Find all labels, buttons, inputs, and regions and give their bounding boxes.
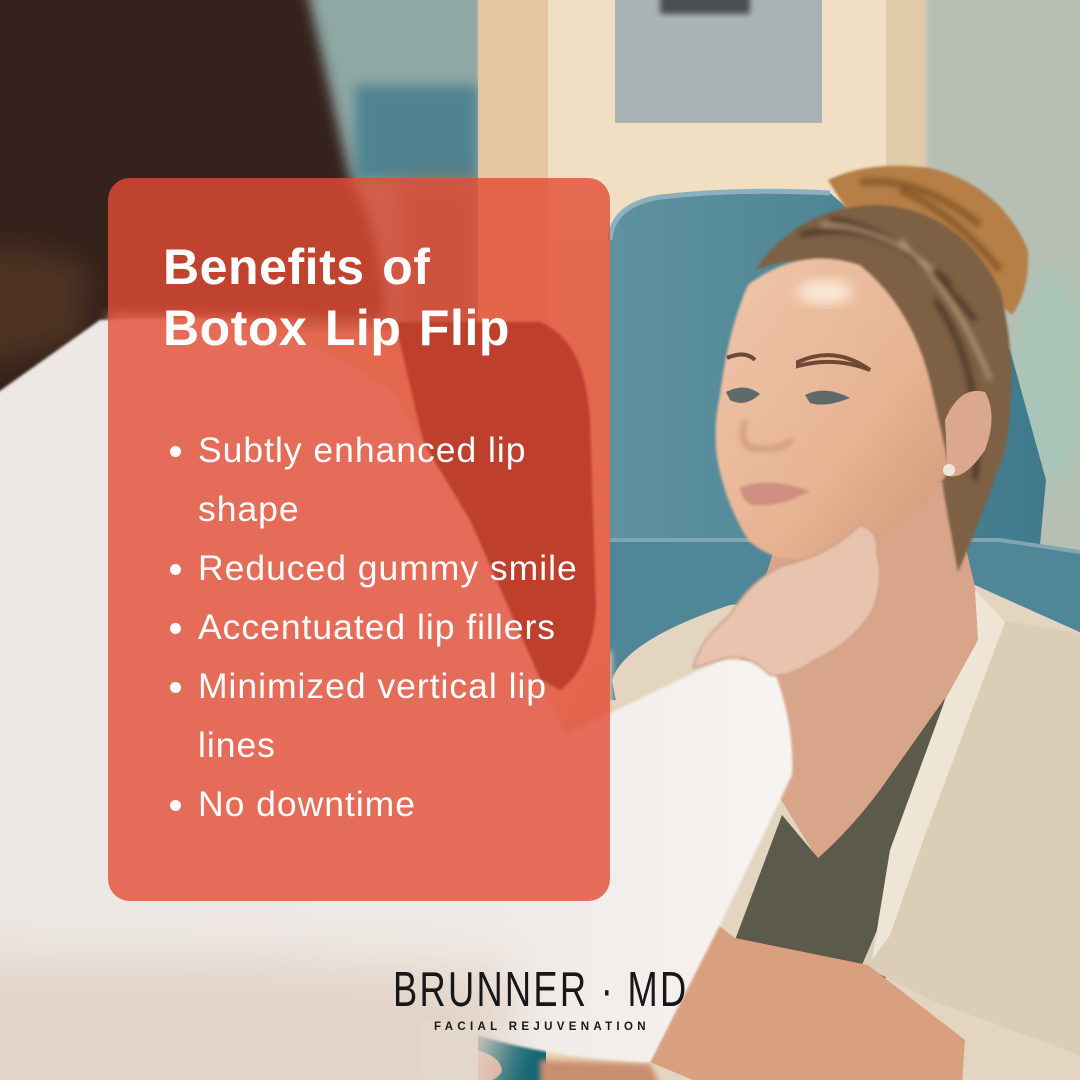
panel: benefits <box>108 178 610 901</box>
doctor's hand <box>693 525 880 675</box>
patient's forearm <box>650 925 965 1080</box>
coat lower shading <box>0 960 520 1080</box>
benefits list: shape <box>198 489 300 529</box>
patient's shirt <box>735 698 945 978</box>
patient's neck and chest <box>740 480 978 860</box>
patient's head <box>715 166 1028 572</box>
eyes <box>726 387 760 403</box>
benefits list: Minimized vertical lip <box>198 666 547 706</box>
coat edge at bottom <box>420 1020 478 1080</box>
heading: Botox Lip Flip <box>163 300 510 356</box>
benefits list <box>170 430 578 824</box>
hand mirror <box>395 322 596 690</box>
eyebrows <box>727 354 870 370</box>
logo: Brunner MD: BRUNNER · MD <box>393 963 688 1017</box>
benefits list: Subtly enhanced lip <box>198 430 526 470</box>
benefits list: Accentuated lip fillers <box>198 607 556 647</box>
hair bun <box>828 166 1028 315</box>
face <box>715 258 950 559</box>
hair highlight <box>0 248 90 370</box>
benefits list: lines <box>198 725 276 765</box>
ear <box>945 391 992 476</box>
nose <box>743 420 792 449</box>
chair <box>476 191 1080 1080</box>
doctor's coat <box>0 318 792 1080</box>
benefits list: No downtime <box>198 784 416 824</box>
heading <box>163 239 510 356</box>
heading: Benefits of <box>163 239 430 295</box>
cardigan front <box>862 620 1080 1070</box>
hair <box>755 205 1011 572</box>
patient's cardigan <box>612 585 1080 1080</box>
lips <box>740 483 810 505</box>
benefits list: Reduced gummy smile <box>198 548 578 588</box>
logo: Brunner MD: FACIAL REJUVENATION <box>434 1021 650 1033</box>
doctor's hair <box>0 0 385 410</box>
